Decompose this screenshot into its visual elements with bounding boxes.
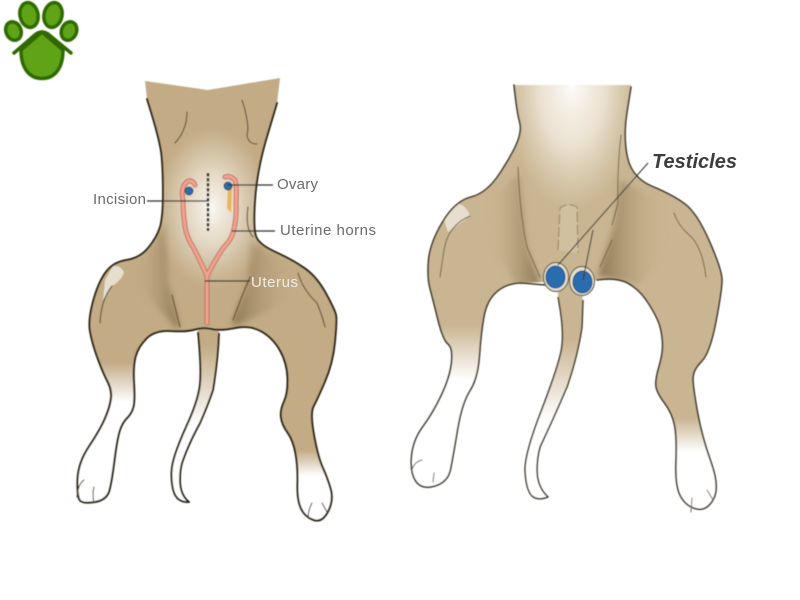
right ovary [224,182,232,190]
icon: green paw logo [3,1,80,79]
left testicle [544,262,568,292]
body silhouette [411,85,722,509]
right testicle [570,266,594,296]
tail outline [525,297,583,499]
uterus and uterine horns [182,176,236,323]
leader lines: testicles [558,163,648,280]
body silhouette [77,78,336,521]
fur crease lines [412,135,713,512]
penis sheath [558,205,578,253]
figure: male dog neuter diagram [405,84,725,515]
label: uterus: Uterus [251,274,298,291]
label: uterine horns: Uterine horns [280,222,376,239]
label: ovary: Ovary [277,176,318,193]
body outline [411,85,722,509]
left ovary [185,187,193,195]
label: testicles: Testicles [652,151,737,173]
shading and leg fades [405,84,725,515]
fur crease lines [77,100,327,517]
shading and leg fades [78,134,332,520]
body outline [77,99,336,521]
figure: female dog spay diagram [70,78,342,530]
incision dashed line [207,173,209,231]
labels: female diagram [93,176,376,291]
leader lines [147,185,275,281]
tail outline [171,332,219,502]
label: incision: Incision [93,191,146,208]
uterine tube [227,188,232,213]
